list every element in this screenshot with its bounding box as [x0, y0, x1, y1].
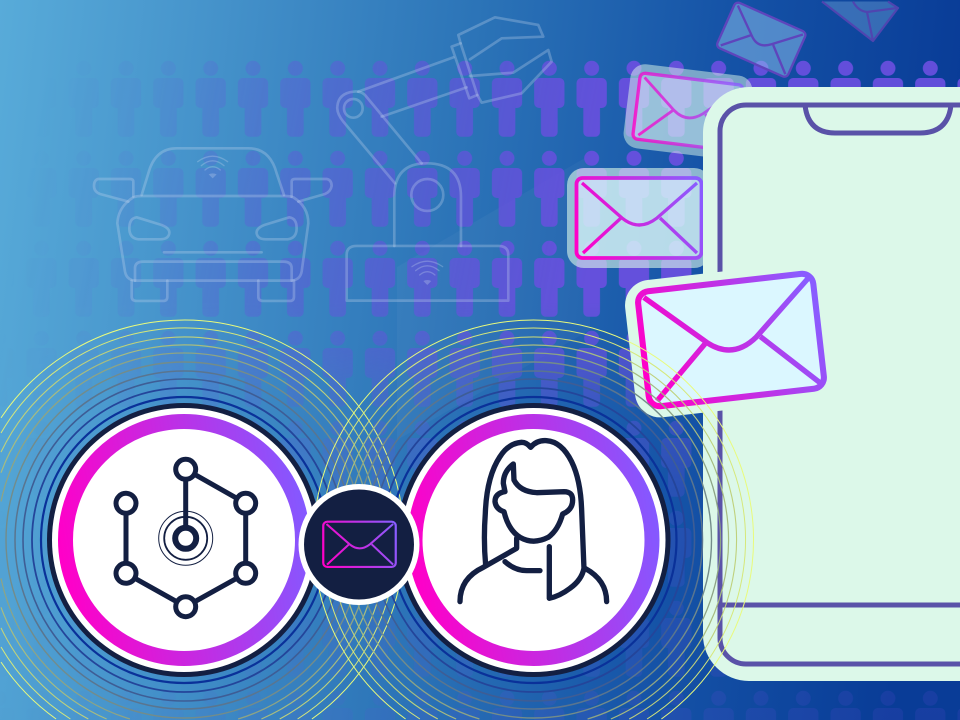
icon: small gradient envelope	[323, 522, 396, 567]
signal rings: left	[1, 320, 404, 719]
phone notch	[805, 105, 951, 133]
icon: connected car	[94, 148, 332, 301]
phone home bar line	[720, 602, 960, 608]
icon: woman outline	[460, 441, 607, 602]
phone screen outline	[720, 105, 960, 664]
phone body	[703, 87, 960, 681]
icon: large foreground envelope	[622, 260, 840, 420]
badge: woman avatar	[396, 403, 670, 677]
icon: robot arm	[337, 17, 552, 301]
signal rings: right	[313, 320, 754, 719]
icon: translucent envelope middle	[567, 168, 711, 268]
icon: far top-right envelope	[822, 2, 898, 41]
icon: hexagon network	[116, 459, 256, 617]
badge: network hexagon	[47, 403, 321, 677]
phone	[703, 87, 960, 681]
icon: translucent envelope upper	[622, 63, 754, 161]
icon: fading envelope top	[716, 1, 807, 78]
badge: center envelope	[298, 484, 420, 605]
faint diagonal light shape	[397, 155, 590, 440]
